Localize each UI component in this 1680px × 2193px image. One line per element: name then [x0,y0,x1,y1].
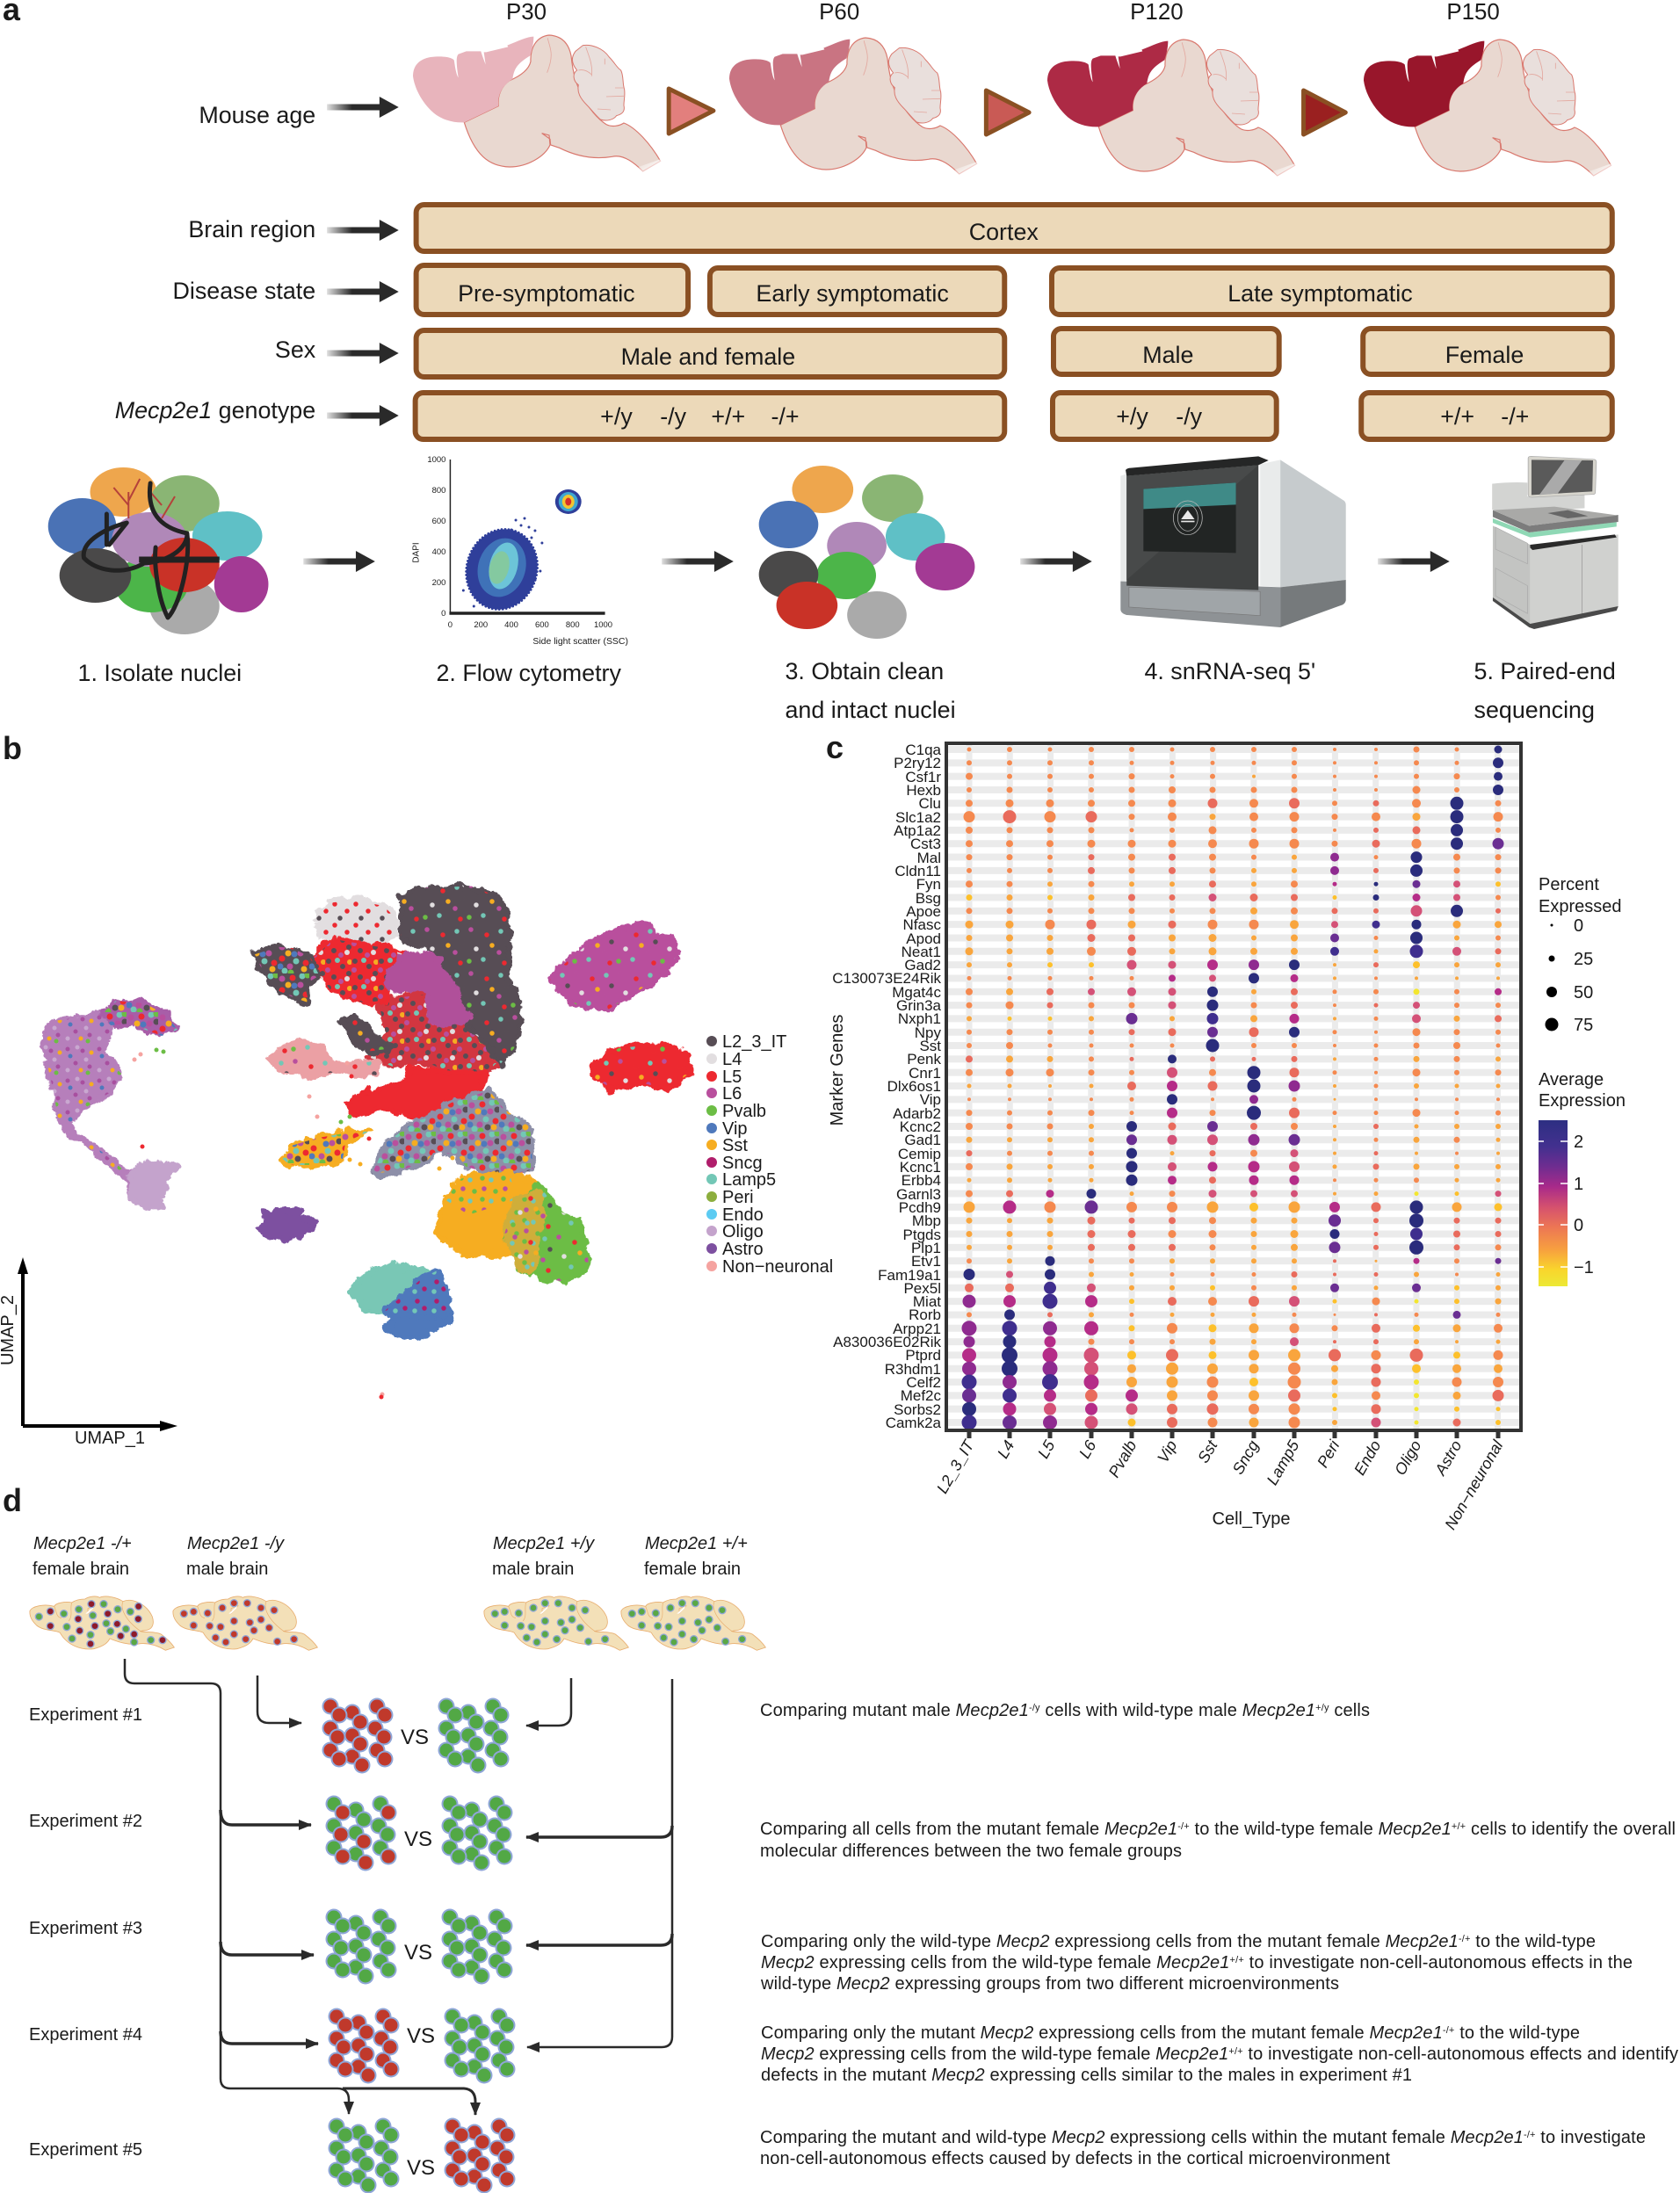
genotype labels: Mecp2e1 -/+ [33,1534,132,1553]
gene labels: Cst3 [910,836,941,852]
colour legend: 0 [1574,1216,1583,1235]
experiment labels: Experiment #1 [29,1705,142,1725]
brain: wild-type male [484,1596,628,1650]
boxes: genotype: +/+ [1440,403,1474,430]
boxes: genotype: +/y [600,403,633,430]
gene labels: Nfasc [903,916,941,933]
cell type labels: Non−neuronal [1441,1437,1507,1532]
description: experiment 3: to the wild-type [1471,1932,1596,1951]
size legend: 25 [1574,950,1593,969]
age labels: P60 [819,0,859,25]
panel c: dot plot [826,729,1626,1532]
genotype labels: male brain [492,1560,574,1579]
description: experiment 1: -/y [1029,1703,1040,1713]
boxes: genotype: -/+ [1501,403,1529,430]
size legend [1539,875,1622,1035]
gene labels: Sst [919,1038,941,1054]
chart: flow cytometry: 600 [535,620,549,630]
gene labels: Hexb [906,782,941,799]
gene labels: Slc1a2 [895,809,941,826]
gene labels: Mal [917,850,941,866]
box: cortex: Cortex [969,219,1039,245]
legend: Endo [722,1205,764,1225]
gene labels: Mgat4c [892,984,941,1001]
UMAP: right excitatory clusters [549,922,689,1089]
boxes: disease state: Pre-symptomatic [458,280,635,307]
UMAP: main clusters [255,887,589,1339]
box: cortex [416,205,1612,251]
boxes: disease state [416,265,1612,315]
description: experiment 2: to the wild-type female [1190,1820,1378,1839]
gene labels: Dlx6os1 [887,1078,941,1095]
gene labels: Adarb2 [893,1105,941,1122]
boxes: sex: Male and female [621,344,795,370]
genotype labels: Mecp2e1 -/y [187,1534,285,1553]
description: experiment 3: +/+ [1230,1955,1244,1965]
icon: clean nuclei [759,466,974,639]
colour legend: 2 [1574,1133,1583,1152]
plot frame and ticks [946,743,1521,1438]
step labels: 1. Isolate nuclei [78,660,242,686]
boxes: genotype: -/+ [771,403,800,430]
step labels: 4. snRNA-seq 5' [1144,658,1315,684]
gene labels: Mef2c [901,1387,941,1404]
gene labels: R3hdm1 [885,1361,941,1378]
flow lines from female mutant [125,1659,475,2115]
row labels: Brain region [188,216,315,242]
age labels: P150 [1446,0,1500,25]
chart: flow cytometry: 600 [432,517,445,526]
description: experiment 2: +/+ [1452,1821,1466,1832]
gene labels: Grin3a [896,997,942,1014]
age progression arrowheads [669,89,1345,134]
experiment labels: Experiment #4 [29,2025,142,2045]
gene labels: Pcdh9 [899,1199,941,1216]
experiment labels: Experiment #5 [29,2140,142,2160]
cell type labels: Sncg [1229,1437,1262,1478]
colour legend: Expression [1539,1091,1626,1111]
gene labels: Fam19a1 [878,1267,941,1284]
colour legend: Average [1539,1070,1604,1089]
gene labels: Arpp21 [893,1321,941,1337]
legend: L6 [722,1084,742,1104]
comparison 3: VS [404,1941,432,1965]
cell type labels: Vip [1154,1437,1180,1466]
row labels: Mecp2e1 genotype [115,397,315,423]
axis title: cell type: Cell_Type [1213,1509,1290,1529]
row labels: Disease state [172,278,315,304]
gene labels: Gad1 [904,1132,941,1148]
step labels: 3. Obtain clean [786,658,944,684]
size legend: Percent [1539,875,1599,894]
genotype labels: female brain [644,1560,741,1579]
gene labels: Vip [920,1091,941,1108]
size legend: 50 [1574,983,1593,1002]
boxes: genotype: +/+ [711,403,745,430]
description: experiment 3 [760,1932,1633,1994]
cell type labels: Lamp5 [1264,1437,1303,1488]
gene labels: Gad2 [904,957,941,973]
description: experiment 2: cells to identify the overall [1466,1820,1676,1839]
legend: Lamp5 [722,1170,776,1190]
cell type labels [933,1436,1507,1532]
brain: mutant female [30,1596,174,1650]
icon: snRNA-seq instrument [1120,456,1346,627]
gene labels: Npy [915,1024,941,1041]
legend: L4 [722,1050,742,1069]
cell type labels: Endo [1351,1437,1384,1478]
description: experiment 1: cells with wild-type male [1040,1701,1242,1720]
chart: flow cytometry: 200 [432,578,445,588]
description: experiment 4: to the wild-type [1454,2023,1580,2043]
gene labels: Atp1a2 [894,822,941,839]
colour legend: −1 [1574,1258,1594,1277]
description: experiment 1: Mecp2e1 [1242,1701,1315,1720]
description: experiment 1: cells [1329,1701,1370,1720]
description: experiment 2: Mecp2e1 [1379,1820,1452,1839]
cell type labels: Astro [1431,1437,1465,1479]
boxes: genotype: -/y [1176,403,1203,430]
chart: flow cytometry: 800 [432,486,445,496]
dot plot values [961,745,1504,1430]
chart: flow cytometry [412,455,628,647]
legend: Oligo [722,1222,764,1241]
gene labels: Clu [918,795,941,812]
gene labels: Bsg [916,890,941,907]
comparison 4: VS [407,2024,435,2048]
description: experiment 4: Mecp2 expressing cells from the wild-type female Mecp2e1 [761,2045,1228,2064]
gene labels: Celf2 [906,1374,941,1391]
boxes: disease state: Early symptomatic [756,280,949,307]
gene labels: Kcnc1 [900,1159,941,1176]
description: experiment 4: -/+ [1443,2025,1454,2036]
gene labels: Miat [913,1293,941,1310]
gene labels: Erbb4 [902,1172,941,1189]
step labels: 5. Paired-end [1474,658,1616,684]
comparison 1 [330,1706,501,1765]
age labels [506,0,1500,25]
UMAP axes: UMAP_1 [75,1429,145,1448]
description: experiment 3: Comparing only the wild-type Mecp2 expressiong cells from the mutant female Mecp2e1 [761,1932,1459,1951]
comparison 3 [334,1917,504,1976]
gene labels: Penk [907,1051,941,1068]
gene labels: Ptprd [905,1347,941,1364]
boxes: genotype: -/y [660,403,687,430]
genotype labels: Mecp2e1 +/+ [645,1534,748,1553]
gene labels: Cldn11 [894,863,941,879]
brain P30 [413,35,663,176]
cell type labels: Sst [1194,1437,1221,1466]
size legend: 75 [1574,1016,1593,1035]
brain P120 [1047,40,1298,180]
row arrows [327,97,399,426]
gene labels: Mbp [912,1212,941,1229]
age labels: P120 [1130,0,1184,25]
description: experiment 2: Comparing all cells from the mutant female Mecp2e1 [760,1820,1177,1839]
experiment labels: Experiment #3 [29,1919,142,1938]
gene labels: Apod [906,930,941,947]
gene labels: C130073E24Rik [832,970,941,987]
description: experiment 4: Comparing only the mutant Mecp2 expressiong cells from the mutant female Mecp2e1 [761,2023,1443,2043]
genotype labels: male brain [186,1560,268,1579]
description: experiment 4: +/+ [1228,2046,1243,2057]
icon: dissected nuclei [48,467,268,634]
description: experiment 3: Mecp2 expressing cells from the wild-type female Mecp2e1 [761,1953,1229,1972]
boxes: genotype [416,393,1612,439]
legend: Non−neuronal [722,1257,833,1277]
gene labels: Csf1r [905,769,941,785]
colour legend [1539,1070,1626,1286]
chart: flow cytometry: 1000 [427,455,445,465]
description: experiment 3: -/+ [1459,1934,1470,1944]
description: experiment 3: wild-type Mecp2 expressing groups from two different microenvironments [760,1974,1339,1994]
size legend: 0 [1574,916,1583,936]
gene labels: A830036E02Rik [833,1334,941,1350]
panel letter c: c [826,729,844,765]
step labels: and intact nuclei [786,697,956,723]
gene labels: P2ry12 [894,755,941,771]
chart: flow cytometry: 200 [474,620,488,630]
step labels: 2. Flow cytometry [437,660,621,686]
genotype labels [33,1534,748,1579]
comparison 2 [334,1804,504,1863]
size legend: Expressed [1539,897,1622,916]
legend: Sncg [722,1154,763,1173]
gene labels [832,742,942,1431]
genotype labels: female brain [33,1560,129,1579]
brain: wild-type female [621,1596,765,1650]
chart: flow cytometry: 400 [504,620,518,630]
design table and workflow [3,0,1616,723]
panel letter d: d [3,1482,22,1518]
cell type labels: Pvalb [1105,1437,1140,1480]
flow line from male wild-type [526,1678,571,1726]
comparison 2: VS [404,1828,432,1851]
description: experiment 5: non-cell-autonomous effects caused by defects in the cortical microenvironment [760,2149,1390,2168]
chart: flow cytometry: 800 [566,620,580,630]
panel d: experiment comparisons [3,1482,1678,2185]
chart: flow cytometry: 400 [432,547,445,557]
UMAP axes [0,1257,177,1448]
row labels: Sex [275,337,316,363]
comparison 5: VS [407,2156,435,2180]
icon: sequencer [1492,456,1618,629]
chart: flow cytometry: 1000 [594,620,612,630]
step labels [78,658,1616,723]
description: experiment 2: -/+ [1177,1821,1190,1832]
boxes: sex: Male [1142,342,1193,368]
panel b: UMAP [0,730,833,1448]
flow line from male mutant [257,1676,301,1723]
gene labels: Neat1 [902,944,941,960]
legend: Sst [722,1136,748,1155]
description: experiment 3: to investigate non-cell-autonomous effects in the [1244,1953,1633,1972]
colour legend: 1 [1574,1175,1583,1194]
gene labels: Rorb [909,1306,941,1323]
description: experiment 2: molecular differences between the two female groups [760,1842,1182,1861]
description: experiment 1: Comparing mutant male Mecp2e1 [760,1701,1029,1720]
step labels: sequencing [1474,697,1595,723]
description: experiment 1: +/y [1315,1703,1329,1713]
boxes: genotype: +/y [1116,403,1148,430]
boxes: sex [416,329,1612,377]
gene labels: Camk2a [886,1415,942,1431]
gene labels: Plp1 [911,1240,941,1256]
cell type labels: Oligo [1391,1437,1424,1478]
description: experiment 2 [760,1820,1676,1861]
comparison 1: VS [401,1726,429,1749]
axis title: marker genes: Marker Genes [828,1015,847,1125]
legend: Vip [722,1119,748,1139]
chart: flow cytometry: 0 [441,609,445,619]
gene labels: Cemip [898,1146,941,1162]
gene labels: Apoe [906,903,941,920]
chart: flow cytometry: DAPI [412,542,422,563]
brain P150 [1364,40,1614,180]
panel a: experimental design [3,0,1618,723]
boxes: sex: Female [1445,342,1524,368]
chart: flow cytometry: 0 [448,620,453,630]
legend: Peri [722,1188,754,1207]
experiment labels [29,1705,142,2160]
age labels: P30 [506,0,547,25]
UMAP: non-neuronal left cluster [43,1001,177,1208]
chart: flow cytometry: Side light scatter (SSC) [532,637,628,647]
legend: L2_3_IT [722,1032,786,1052]
legend: Astro [722,1240,764,1259]
cell type labels: L6 [1075,1437,1100,1461]
legend: Pvalb [722,1102,766,1121]
gene labels: Fyn [916,876,941,893]
gene labels: Sorbs2 [894,1401,941,1418]
description: experiment 4: to investigate non-cell-autonomous effects and identify [1243,2045,1678,2064]
gene labels: Etv1 [911,1253,941,1270]
comparison 4 [337,2016,507,2075]
stray UMAP cells [134,1050,453,1397]
description: experiment 5 [760,2128,1646,2168]
cell type labels: Peri [1314,1437,1343,1471]
row labels [115,102,316,423]
row labels: Mouse age [199,102,315,128]
comparison 5 [337,2126,507,2185]
process arrows [303,551,1450,572]
boxes: disease state: Late symptomatic [1227,280,1413,307]
legend [712,1032,833,1277]
experiment labels: Experiment #2 [29,1812,142,1831]
panel letter b: b [3,730,22,766]
flow lines from female wild-type [526,1679,672,2047]
plot background stripes [967,746,1503,1426]
genotype labels: Mecp2e1 +/y [493,1534,595,1553]
gene labels: Pex5l [903,1280,941,1297]
description: experiment 4: defects in the mutant Mecp2 expressing cells similar to the males in experiment #1 [761,2066,1412,2085]
gene labels: Kcnc2 [900,1118,941,1135]
cell type labels: L2_3_IT [933,1436,978,1496]
description: experiment 4 [761,2023,1678,2085]
gene labels: Ptgds [903,1227,941,1243]
cell type labels: L4 [994,1437,1017,1461]
gene labels: Cnr1 [909,1065,941,1082]
gene labels: Garnl3 [896,1186,941,1203]
legend: L5 [722,1068,742,1087]
description: experiment 5: Comparing the mutant and wild-type Mecp2 expressiong cells within the mutant female Mecp2e1 [760,2128,1524,2147]
brain: mutant male [173,1596,317,1650]
brain P60 [729,38,980,178]
description: experiment 5: -/+ [1524,2130,1535,2140]
description: experiment 5: to investigate [1536,2128,1646,2147]
gene labels: C1qa [905,742,942,758]
gene labels: Nxph1 [898,1010,941,1027]
cell type labels: L5 [1034,1437,1059,1461]
